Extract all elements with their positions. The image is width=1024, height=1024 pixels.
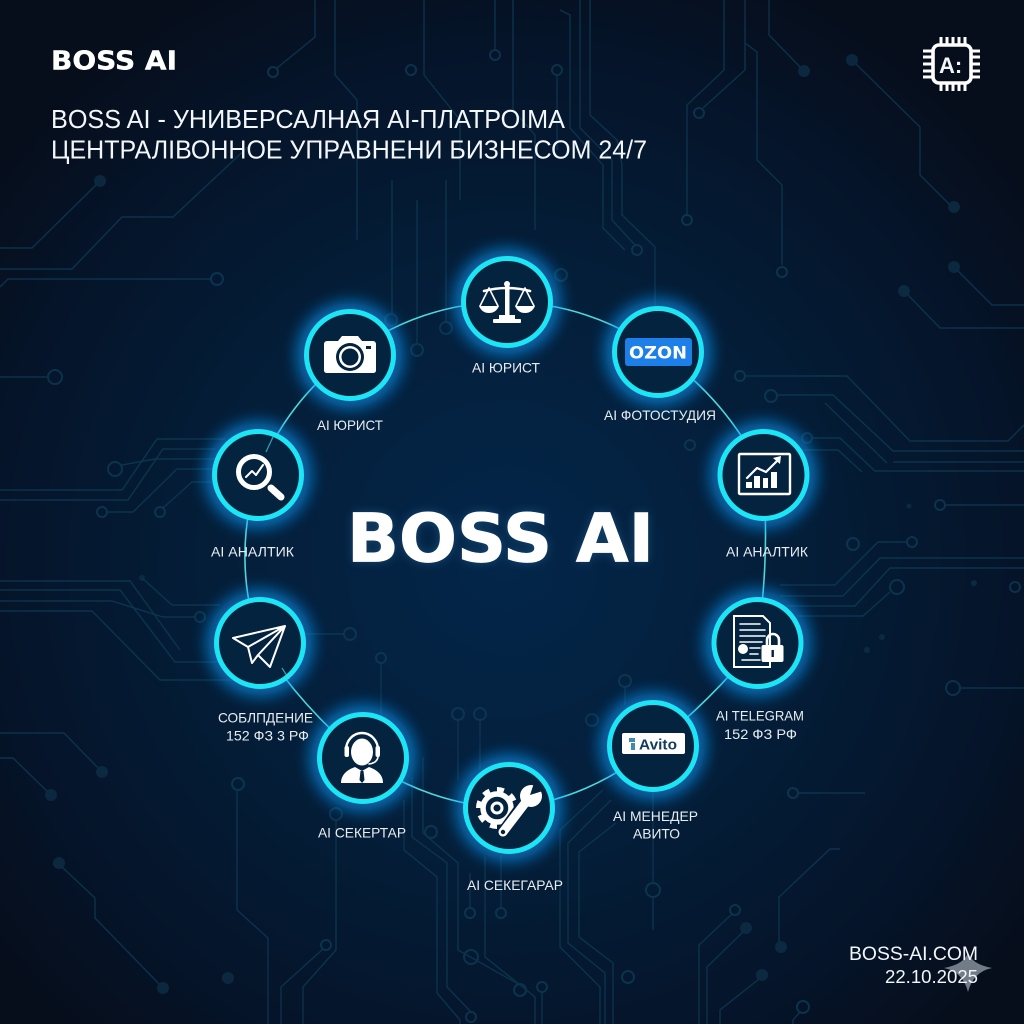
node: Avito [608,701,698,791]
label: scales: AI ЮРИСТ [472,360,540,376]
node: scales [462,257,552,347]
icon: gear and wrench [478,780,546,834]
icon: Avito logo: Avito [639,736,677,754]
icon: camera [324,336,376,373]
header logo: BOSS AI [51,46,177,76]
icon: headset operator [341,733,383,783]
node: document [712,598,802,688]
label: paper plane [218,710,313,744]
icon: AI chip [923,37,980,91]
label: Avito [613,808,698,842]
icon: paper plane [233,626,285,667]
node: camera [305,310,395,400]
label: camera: AI ЮРИСТ [317,417,383,433]
node: paper plane [215,598,305,688]
label: headset: AI СЕКЕРТАР [318,824,406,840]
icon: document with lock [734,616,784,667]
label: document: AI TELEGRAM [716,708,804,724]
label: paper plane: СОБЛПДЕНИЕ [218,710,313,726]
label: Avito: AI МЕНЕДЕР [613,808,698,824]
label: gear: AI СЕКЕГАРАР [467,877,563,893]
label: document: 152 ФЗ РФ [724,726,797,742]
title: BOSS AI - УНИВЕРСАЛНАЯ AI-ПЛАТРОIМА [51,104,566,134]
node: magnifier [213,430,303,520]
central logo: BOSS AI [347,500,654,578]
icon: AI chip: A: [939,53,962,78]
icon: scales of justice [479,281,535,323]
icon: magnifier with trend line [238,456,281,497]
label: magnifier: AI АНАЛТИК [211,544,295,560]
node: gear and wrench [464,763,554,853]
label: chart: AI АНАЛТИК [726,544,809,560]
footer website and date: BOSS-AI.COM [849,943,978,965]
footer website and date [849,943,978,987]
label: Avito: АВИТО [633,826,680,842]
title: ЦЕНТРАЛIВОННОЕ УПРАВНЕНИ БИЗНЕСОМ 24/7 [51,134,647,164]
label: OZON: AI ФОТОСТУДИЯ [604,407,716,423]
node: chart [718,430,808,520]
node: OZON [613,307,703,397]
label: document [716,708,804,742]
icon: growth chart [739,454,790,494]
node: headset operator [318,713,408,803]
label: paper plane: 152 ФЗ 3 РФ [226,728,309,744]
icon: OZON logo: OZON [629,344,687,364]
icon: sparkle star [944,952,992,992]
central logo: BOSS AI [347,500,654,578]
connecting ring arcs [245,302,766,808]
footer website and date: 22.10.2025 [885,966,978,987]
title [51,104,647,164]
